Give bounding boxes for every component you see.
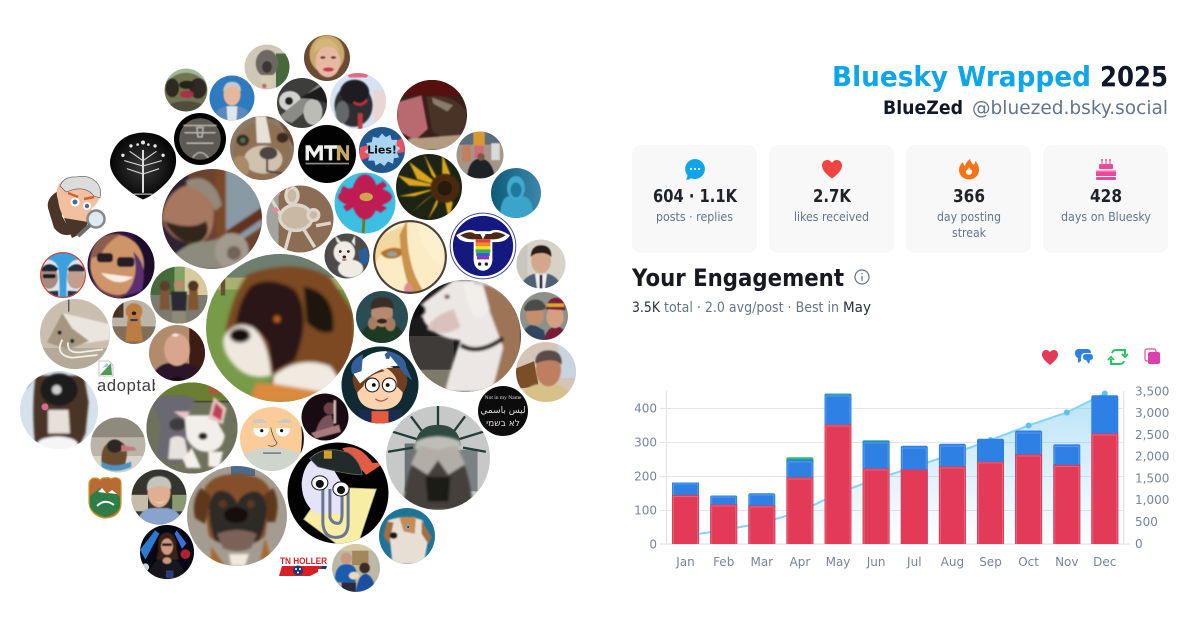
y axis left labels: 0 bbox=[649, 538, 657, 552]
avatar: family with dogs bbox=[150, 266, 208, 325]
bars: Jul bbox=[901, 446, 928, 544]
bars: Apr bbox=[786, 457, 813, 544]
avatar: painted blonde portrait bbox=[373, 220, 447, 296]
x axis month labels bbox=[675, 555, 1116, 569]
broken image alt text: adoptable bbox=[97, 377, 176, 395]
heading: Your Engagement: Your Engagement bbox=[631, 264, 844, 292]
avatar: woman on TV set bbox=[140, 525, 194, 579]
avatar: rainbow cow on navy bbox=[450, 212, 516, 280]
y axis right labels: 1,500 bbox=[1135, 472, 1169, 486]
y axis right labels: 3,500 bbox=[1135, 384, 1169, 398]
bars: Jan bbox=[672, 482, 699, 544]
avatar: dog on teal background bbox=[379, 508, 435, 564]
avatar: man with cat bbox=[162, 169, 262, 269]
bars: Mar bbox=[748, 493, 775, 544]
bars: Dec bbox=[1091, 395, 1118, 544]
avatar: Statue of Liberty facepalm bbox=[386, 406, 490, 510]
avatar: dark concert photo bbox=[302, 394, 348, 440]
engagement summary: May bbox=[843, 300, 871, 316]
avatar: man covering mouth bbox=[356, 291, 408, 343]
avatar: red zinnia on blue bbox=[334, 172, 396, 234]
bars: Sep bbox=[977, 439, 1004, 544]
y axis left labels bbox=[634, 402, 657, 552]
avatar: bulldog bbox=[230, 116, 294, 181]
avatar: cartoon bald old man bbox=[240, 407, 304, 471]
avatar: goldendoodle bbox=[112, 300, 156, 344]
stat card: likes received: 2.7K bbox=[813, 186, 852, 207]
logo: TN Holler: TN HOLLER bbox=[280, 556, 327, 566]
bars: Jun bbox=[863, 440, 890, 544]
x axis month labels: Jul bbox=[906, 555, 922, 569]
icon: heart bbox=[822, 160, 842, 178]
bars: Aug bbox=[939, 444, 966, 544]
avatar: Forever Oakland badge bbox=[174, 113, 226, 165]
avatar: chalk doodle bbox=[266, 183, 334, 252]
account name and handle: @bluezed.bsky.social bbox=[972, 97, 1168, 119]
engagement summary: 3.5K bbox=[632, 300, 661, 316]
avatar: volunteer and child bbox=[332, 544, 380, 592]
avatar: blonde woman bbox=[304, 35, 350, 81]
stat card: day posting streak bbox=[906, 145, 1031, 253]
y axis right labels: 2,000 bbox=[1135, 450, 1169, 464]
icon: flame bbox=[959, 159, 979, 180]
avatar: westie bbox=[324, 234, 370, 278]
x axis month labels: Apr bbox=[790, 555, 810, 569]
avatar: two men with red ring bbox=[40, 252, 86, 298]
y axis right labels bbox=[1135, 384, 1169, 551]
avatar: dog on blanket bbox=[397, 80, 467, 150]
avatar: boxer face portrait bbox=[187, 466, 287, 566]
y axis right labels: 0 bbox=[1135, 537, 1143, 551]
avatar: Not in my Name: Not in my Name bbox=[485, 395, 522, 401]
y axis right labels: 2,500 bbox=[1135, 428, 1169, 442]
x axis month labels: Feb bbox=[713, 555, 734, 569]
avatar: Dipper Pines bbox=[342, 346, 418, 424]
avatar: brindle dog in snow bbox=[20, 371, 98, 452]
engagement summary: total · 2.0 avg/post · Best in bbox=[664, 300, 839, 316]
x axis month labels: May bbox=[826, 555, 850, 569]
avatar: smiling older man bbox=[132, 470, 186, 524]
x axis month labels: Oct bbox=[1018, 555, 1039, 569]
stat card: day posting streak: day posting bbox=[937, 209, 1001, 224]
avatar: Not in my Name: ليس باسمي bbox=[480, 406, 526, 416]
avatar: Not in my Name: לא בשמי bbox=[486, 419, 520, 429]
x axis month labels: Nov bbox=[1055, 555, 1079, 569]
x axis month labels: Dec bbox=[1093, 555, 1116, 569]
y axis left labels: 200 bbox=[634, 470, 657, 484]
icon: birthday cake bbox=[1096, 159, 1116, 180]
y axis right labels: 3,000 bbox=[1135, 406, 1169, 420]
icon: reposts bbox=[1108, 350, 1128, 364]
avatar: shih tzu bbox=[164, 68, 208, 115]
stat card: day posting streak: 366 bbox=[953, 186, 985, 207]
stat card: likes received: likes received bbox=[794, 209, 869, 224]
avatar: man in yellow shirt bbox=[516, 342, 576, 402]
avatar: snowy black dog bbox=[330, 72, 386, 129]
avatar bubble cluster bbox=[20, 35, 576, 592]
x axis month labels: Mar bbox=[750, 555, 773, 569]
bars: Feb bbox=[710, 496, 737, 544]
account name and handle: BlueZed bbox=[883, 97, 963, 119]
y axis left labels: 400 bbox=[634, 402, 657, 416]
avatar: Lies badge: Lies! bbox=[367, 144, 397, 157]
icon: quotes bbox=[1145, 349, 1160, 364]
avatar: Not in my Name bbox=[478, 386, 528, 436]
icon: likes bbox=[1042, 350, 1058, 365]
stat card: posts and replies: 604 · 1.1K bbox=[653, 186, 738, 207]
avatar: Lies badge bbox=[359, 127, 405, 173]
avatar: dog in car bbox=[90, 418, 146, 472]
icon: replies bbox=[1075, 349, 1093, 364]
bars: May bbox=[824, 394, 852, 544]
broken image alt text bbox=[98, 360, 155, 394]
avatar: smiling man in glasses bbox=[88, 232, 154, 298]
avatar: Clippy on black bbox=[288, 442, 388, 544]
stat card: day posting streak: streak bbox=[952, 225, 987, 240]
title: 2025 bbox=[1100, 60, 1168, 93]
title: Bluesky Wrapped bbox=[832, 60, 1091, 93]
avatar: couple with caps bbox=[520, 292, 568, 340]
icon: chat bubble bbox=[685, 159, 705, 180]
avatar: grey mastiff bbox=[244, 44, 290, 90]
stat card: days on Bluesky bbox=[1043, 145, 1168, 253]
x axis month labels: Aug bbox=[941, 555, 964, 569]
x axis month labels: Sep bbox=[979, 555, 1002, 569]
y axis left labels: 100 bbox=[634, 504, 657, 518]
avatar: cat in paper bag bbox=[40, 299, 110, 369]
bars: Oct bbox=[1015, 430, 1042, 544]
avatar: hooded figure bbox=[491, 168, 541, 218]
y axis right labels: 1,000 bbox=[1135, 493, 1169, 507]
account name and handle bbox=[883, 97, 1168, 119]
cumulative area and line bbox=[686, 390, 1108, 544]
avatar: white tree of Gondor bbox=[110, 132, 176, 200]
avatar: man in suit bbox=[516, 240, 566, 288]
avatar: man on blue background bbox=[210, 76, 254, 120]
avatar: MTN logo bbox=[298, 125, 356, 183]
avatar: white boxer with collar bbox=[409, 280, 521, 392]
stat card: days on Bluesky: 428 bbox=[1090, 186, 1122, 207]
chart legend icons bbox=[1042, 349, 1160, 365]
avatar: black and white woman in hat bbox=[277, 78, 327, 128]
stat card: likes received bbox=[769, 145, 894, 253]
stat card: posts and replies bbox=[632, 145, 757, 253]
bars: Nov bbox=[1053, 444, 1080, 544]
avatar: bald man bbox=[149, 325, 205, 383]
stacked bars bbox=[672, 394, 1118, 544]
avatar: large boxer dog bbox=[206, 254, 354, 402]
x axis month labels: Jan bbox=[675, 555, 695, 569]
icon: info bbox=[855, 270, 869, 284]
stat card: days on Bluesky: days on Bluesky bbox=[1061, 209, 1152, 224]
stat card: posts and replies: posts · replies bbox=[656, 209, 733, 224]
badge: hand-shaped park patch bbox=[89, 478, 121, 518]
avatar: man in Times Square bbox=[456, 132, 504, 178]
avatar: sunflower bbox=[396, 154, 462, 220]
y axis left labels: 300 bbox=[634, 436, 657, 450]
combo chart: monthly engagement bbox=[634, 384, 1169, 569]
x axis month labels: Jun bbox=[866, 555, 885, 569]
y axis right labels: 500 bbox=[1135, 515, 1158, 529]
logo: TN Holler bbox=[279, 556, 327, 576]
avatar: cartoon detective with magnifier bbox=[48, 176, 104, 238]
avatar: two pit bulls bbox=[146, 382, 238, 474]
